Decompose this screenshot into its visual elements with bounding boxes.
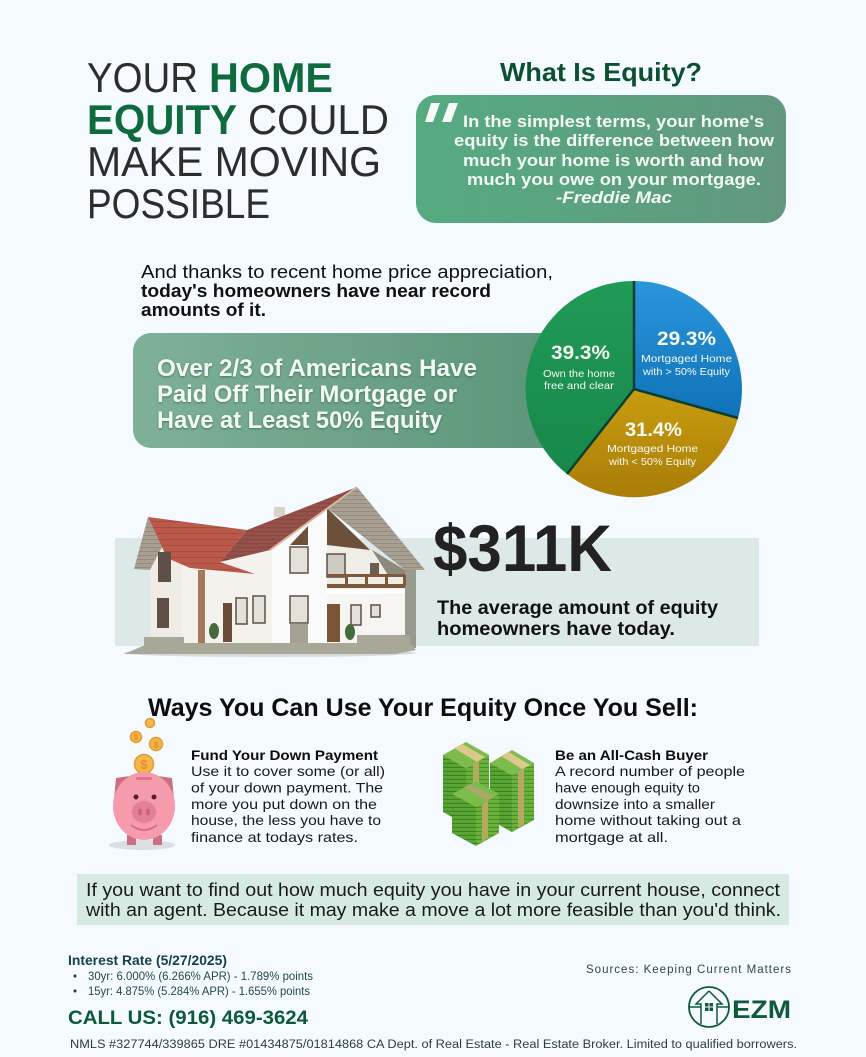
quote text: equity is the difference between how bbox=[454, 131, 775, 150]
icon: stacks of cash bbox=[443, 742, 534, 846]
stat: 311K: $311K bbox=[433, 511, 612, 585]
icon: piggy bank: $ bbox=[134, 733, 139, 742]
text block: all-cash buyer: Be an All-Cash Buyer bbox=[555, 747, 709, 763]
text block: fund your down payment: more you put down on the bbox=[191, 796, 377, 812]
text block: fund your down payment: Fund Your Down Payment bbox=[191, 747, 378, 763]
text block: all-cash buyer: A record number of people bbox=[555, 763, 745, 779]
panel: equity quote bbox=[416, 95, 786, 223]
text block: fund your down payment: finance at todays rates. bbox=[191, 829, 358, 845]
title: COULD bbox=[248, 96, 389, 143]
text block: fund your down payment bbox=[191, 747, 385, 845]
panel: over two thirds banner bbox=[133, 333, 573, 448]
intro text: today's homeowners have near record bbox=[141, 280, 491, 301]
text block: fund your down payment: of your down payment. The bbox=[191, 780, 383, 796]
call us: CALL US: (916) 469-3624 bbox=[68, 1007, 308, 1029]
title: POSSIBLE bbox=[87, 180, 270, 227]
pie label: 39.3 bbox=[543, 343, 615, 392]
title: YOUR bbox=[87, 54, 198, 101]
pie label: 31.4: with < 50% Equity bbox=[608, 456, 697, 468]
pie chart bbox=[526, 281, 742, 497]
quote text bbox=[454, 112, 775, 207]
pie label: 39.3: Own the home bbox=[543, 368, 615, 380]
callout: connect with an agent: with an agent. Because it may make a move a lot more feasible than you'd think. bbox=[85, 899, 781, 920]
icon: piggy bank: $ bbox=[153, 740, 159, 750]
pie label: 39.3: free and clear bbox=[544, 380, 615, 392]
banner text: Paid Off Their Mortgage or bbox=[157, 381, 457, 408]
pie label: 29.3: 29.3% bbox=[657, 329, 716, 350]
front stack bbox=[452, 781, 499, 846]
quote text: -Freddie Mac bbox=[556, 188, 673, 207]
banner text: Have at Least 50% Equity bbox=[157, 407, 443, 434]
text block: all-cash buyer bbox=[555, 747, 745, 845]
pie label: 39.3: 39.3% bbox=[551, 343, 610, 364]
intro text: amounts of it. bbox=[141, 299, 266, 320]
callout: connect with an agent: If you want to find out how much equity you have in your current house, connect bbox=[86, 879, 780, 900]
sources: Sources: Keeping Current Matters bbox=[586, 964, 791, 976]
legal disclaimer: NMLS #327744/339865 DRE #01434875/01814868 CA Dept. of Real Estate - Real Estate Broker. Limited to qualified borrowers. bbox=[70, 1039, 797, 1051]
intro text: And thanks to recent home price appreciation, bbox=[141, 261, 553, 282]
text block: interest rates: Interest Rate (5/27/2025) bbox=[68, 953, 227, 968]
text block: fund your down payment: Use it to cover some (or all) bbox=[191, 763, 385, 779]
text block: all-cash buyer: mortgage at all. bbox=[555, 829, 668, 845]
text block: fund your down payment: house, the less you have to bbox=[191, 812, 381, 828]
text block: all-cash buyer: downsize into a smaller bbox=[555, 796, 715, 812]
text block: interest rates: 15yr: 4.875% (5.284% APR) - 1.655% points bbox=[88, 984, 310, 998]
title: HOME bbox=[209, 54, 333, 101]
banner text: Over 2/3 of Americans Have bbox=[157, 355, 477, 382]
pie label: 29.3: Mortgaged Home bbox=[641, 353, 732, 365]
pie label: 31.4: Mortgaged Home bbox=[607, 443, 698, 455]
pie label: 31.4: 31.4% bbox=[625, 420, 682, 441]
pie label: 29.3: with > 50% Equity bbox=[642, 366, 731, 378]
banner text bbox=[157, 355, 477, 434]
icon: piggy bank: $ bbox=[140, 757, 148, 772]
left stack bbox=[443, 742, 489, 825]
right stack bbox=[490, 750, 534, 832]
panel: equity band bbox=[115, 538, 759, 646]
callout: connect with an agent bbox=[77, 874, 789, 925]
icon: piggy bank bbox=[109, 718, 175, 850]
stat description: The average amount of equity bbox=[437, 598, 718, 619]
text block: interest rates: 30yr: 6.000% (6.266% APR) - 1.789% points bbox=[88, 969, 313, 983]
intro text bbox=[141, 261, 553, 320]
stat description: homeowners have today. bbox=[437, 619, 675, 640]
logo: EZM bbox=[689, 987, 791, 1027]
text block: interest rates bbox=[68, 953, 313, 998]
title: MAKE MOVING bbox=[87, 138, 381, 185]
pie label: 29.3 bbox=[641, 329, 732, 378]
title: EQUITY bbox=[87, 96, 237, 143]
title bbox=[87, 54, 389, 227]
logo: EZM: EZM bbox=[732, 996, 791, 1024]
pie label: 31.4 bbox=[607, 420, 698, 468]
text block: all-cash buyer: home without taking out a bbox=[555, 812, 741, 828]
quote text: much your home is worth and how bbox=[463, 151, 765, 170]
quote text: much you owe on your mortgage. bbox=[467, 170, 761, 189]
text block: all-cash buyer: have enough equity to bbox=[555, 780, 700, 796]
heading: what is equity: What Is Equity? bbox=[500, 57, 702, 87]
icon: house bbox=[124, 487, 425, 657]
quote text: In the simplest terms, your home's bbox=[463, 112, 764, 131]
icon: quotation mark bbox=[425, 103, 458, 122]
heading: ways to use equity: Ways You Can Use Your Equity Once You Sell: bbox=[148, 694, 698, 722]
stat description bbox=[437, 598, 718, 640]
